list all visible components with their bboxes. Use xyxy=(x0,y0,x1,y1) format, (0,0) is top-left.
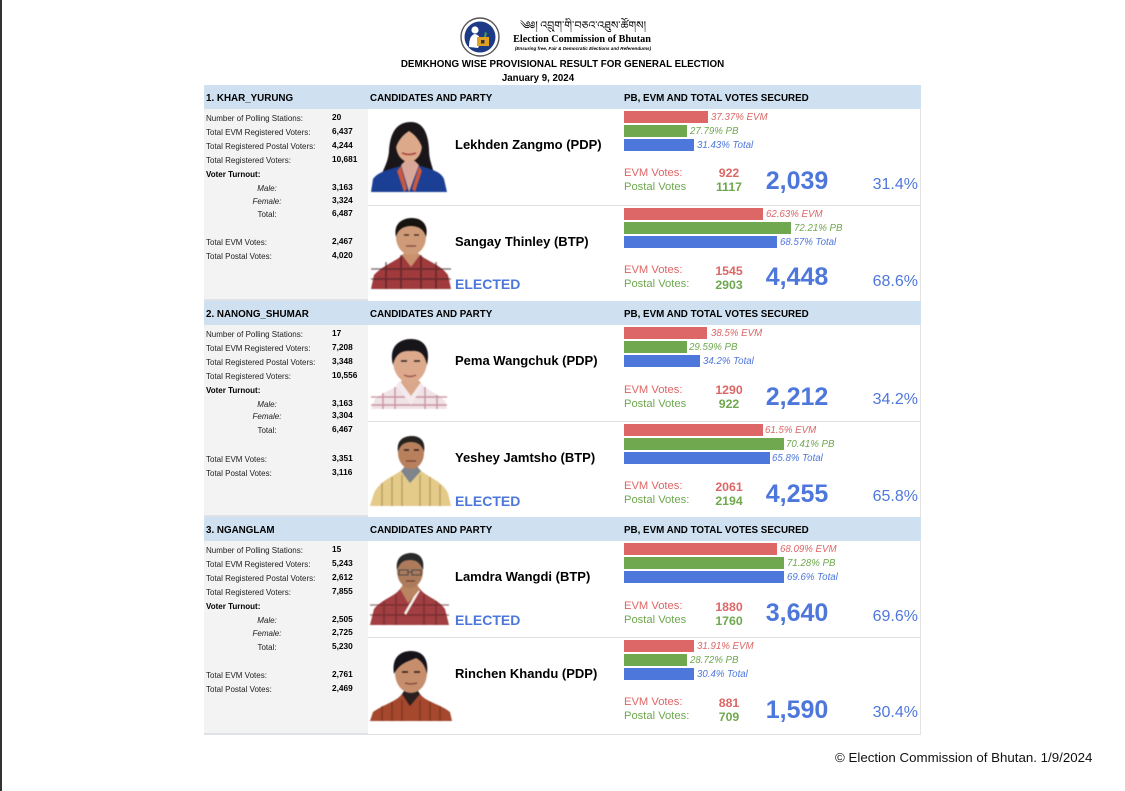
constituency statistics: Male: xyxy=(257,184,277,193)
total votes: 2,212 xyxy=(766,383,828,411)
section header band: PB, EVM AND TOTAL VOTES SECURED xyxy=(624,525,809,536)
candidate name: Lekhden Zangmo (PDP) xyxy=(455,137,602,152)
constituency statistics: 2,505 xyxy=(332,614,353,624)
constituency statistics: Total Postal Votes: xyxy=(206,469,272,478)
postal votes label: Postal Votes xyxy=(624,398,686,410)
constituency statistics: 3,163 xyxy=(332,398,353,408)
EVM votes label: EVM Votes: xyxy=(624,264,682,276)
EVM bar label: 37.37% EVM xyxy=(711,112,768,123)
total votes: 4,255 xyxy=(766,480,828,508)
EVM bar label: 31.91% EVM xyxy=(697,641,754,652)
candidate: Pema Wangchuk xyxy=(368,325,921,422)
EVM bar xyxy=(624,640,694,652)
constituency statistics: 17 xyxy=(332,328,341,338)
constituency statistics: Total EVM Votes: xyxy=(206,238,267,247)
EVM bar label: 61.5% EVM xyxy=(765,425,816,436)
constituency statistics: 6,487 xyxy=(332,208,353,218)
title: DEMKHONG WISE PROVISIONAL RESULT FOR GENERAL ELECTION xyxy=(401,59,724,70)
constituency statistics: 2,469 xyxy=(332,683,353,693)
postal votes count: 709 xyxy=(719,710,739,724)
EVM votes count: 1545 xyxy=(715,264,743,278)
EVM votes label: EVM Votes: xyxy=(624,480,682,492)
EVM bar label: 38.5% EVM xyxy=(711,328,762,339)
vote share: 31.4% xyxy=(873,176,918,193)
total bar label: 34.2% Total xyxy=(703,356,754,367)
PB bar label: 72.21% PB xyxy=(794,223,842,234)
panel: section 1 Khar Yurung xyxy=(204,85,921,301)
constituency statistics: 5,230 xyxy=(332,641,353,651)
EVM votes count: 1880 xyxy=(715,600,743,614)
PB bar xyxy=(624,654,687,666)
constituency statistics: 3,304 xyxy=(332,410,353,420)
constituency statistics: Voter Turnout: xyxy=(206,170,260,179)
constituency statistics: Number of Polling Stations: xyxy=(206,330,303,339)
constituency statistics xyxy=(204,541,368,735)
postal votes count: 1117 xyxy=(716,180,742,194)
constituency statistics: 7,855 xyxy=(332,586,353,596)
section header band: CANDIDATES AND PARTY xyxy=(370,525,492,536)
PB bar label: 27.79% PB xyxy=(690,126,738,137)
constituency statistics: Number of Polling Stations: xyxy=(206,114,303,123)
portrait: Lamdra Wangdi xyxy=(370,552,450,626)
constituency statistics: 2,761 xyxy=(332,669,353,679)
candidate name: Pema Wangchuk (PDP) xyxy=(455,353,598,368)
constituency statistics: 3,324 xyxy=(332,195,353,205)
constituency statistics: 10,556 xyxy=(332,370,357,380)
motto: (Ensuring free, Fair & Democratic Elections and Referendums) xyxy=(515,46,651,51)
constituency statistics xyxy=(204,325,368,517)
constituency statistics: Total Registered Voters: xyxy=(206,588,291,597)
constituency statistics: Total EVM Votes: xyxy=(206,455,267,464)
total bar xyxy=(624,236,777,248)
constituency statistics: Female: xyxy=(253,629,281,638)
PB bar xyxy=(624,557,784,569)
constituency statistics: Voter Turnout: xyxy=(206,602,260,611)
total bar label: 30.4% Total xyxy=(697,669,748,680)
section header band: PB, EVM AND TOTAL VOTES SECURED xyxy=(624,309,809,320)
EVM votes count: 1290 xyxy=(715,383,743,397)
candidate: Sangay Thinley xyxy=(368,206,921,301)
constituency statistics: Total EVM Votes: xyxy=(206,671,267,680)
constituency statistics: Total: xyxy=(257,643,277,652)
constituency statistics: 15 xyxy=(332,544,341,554)
section header band: 1. KHAR_YURUNG xyxy=(206,93,293,104)
postal votes label: Postal Votes: xyxy=(624,494,689,506)
total bar xyxy=(624,452,770,464)
postal votes label: Postal Votes: xyxy=(624,710,689,722)
constituency statistics: 6,437 xyxy=(332,126,353,136)
constituency statistics: Total Postal Votes: xyxy=(206,252,272,261)
constituency statistics: Total Registered Voters: xyxy=(206,156,291,165)
constituency statistics: Total Registered Voters: xyxy=(206,372,291,381)
EVM votes label: EVM Votes: xyxy=(624,384,682,396)
panel: section 3 Nganglam xyxy=(204,517,921,735)
date: January 9, 2024 xyxy=(502,73,574,84)
total votes: 1,590 xyxy=(766,696,828,724)
section header band xyxy=(204,85,921,109)
total votes: 4,448 xyxy=(766,263,828,291)
constituency statistics: Voter Turnout: xyxy=(206,386,260,395)
copyright footer: © Election Commission of Bhutan. 1/9/2024 xyxy=(835,750,1092,765)
total bar xyxy=(624,139,694,151)
section header band: 2. NANONG_SHUMAR xyxy=(206,309,309,320)
constituency statistics: 2,612 xyxy=(332,572,353,582)
postal votes label: Postal Votes: xyxy=(624,278,689,290)
EVM votes count: 2061 xyxy=(715,480,743,494)
header: logo and organisation name xyxy=(460,17,651,57)
PB bar label: 28.72% PB xyxy=(690,655,738,666)
vote share: 65.8% xyxy=(873,488,918,505)
total bar label: 65.8% Total xyxy=(772,453,823,464)
constituency statistics: Total: xyxy=(257,210,277,219)
constituency statistics xyxy=(204,109,368,301)
section header band: 3. NGANGLAM xyxy=(206,525,275,536)
vote share: 30.4% xyxy=(873,704,918,721)
candidate name: Rinchen Khandu (PDP) xyxy=(455,666,597,681)
EVM bar xyxy=(624,327,707,339)
constituency statistics: Total EVM Registered Voters: xyxy=(206,344,310,353)
constituency statistics: 5,243 xyxy=(332,558,353,568)
candidate name: Lamdra Wangdi (BTP) xyxy=(455,569,590,584)
EVM votes count: 881 xyxy=(719,696,739,710)
PB bar xyxy=(624,341,687,353)
section header band: CANDIDATES AND PARTY xyxy=(370,93,492,104)
section header band xyxy=(204,301,921,325)
constituency statistics: Number of Polling Stations: xyxy=(206,546,303,555)
EVM votes label: EVM Votes: xyxy=(624,696,682,708)
elected badge: ELECTED xyxy=(455,276,520,292)
total bar label: 31.43% Total xyxy=(697,140,753,151)
section header band: PB, EVM AND TOTAL VOTES SECURED xyxy=(624,93,809,104)
elected badge: ELECTED xyxy=(455,493,520,509)
constituency statistics: Total EVM Registered Voters: xyxy=(206,128,310,137)
organisation name: Election Commission of Bhutan xyxy=(513,34,651,45)
postal votes count: 1760 xyxy=(715,614,743,628)
constituency statistics: 10,681 xyxy=(332,154,357,164)
PB bar label: 71.28% PB xyxy=(787,558,835,569)
candidate: Lekhden Zangmo xyxy=(368,109,921,206)
candidate name: Yeshey Jamtsho (BTP) xyxy=(455,450,595,465)
candidate: Lamdra Wangdi xyxy=(368,541,921,638)
EVM bar label: 68.09% EVM xyxy=(780,544,837,555)
total bar xyxy=(624,668,694,680)
postal votes count: 922 xyxy=(719,397,739,411)
PB bar label: 70.41% PB xyxy=(786,439,834,450)
portrait: Lekhden Zangmo xyxy=(370,121,448,193)
constituency statistics: Female: xyxy=(253,412,281,421)
section header band xyxy=(204,517,921,541)
constituency statistics: Female: xyxy=(253,197,281,206)
constituency statistics: Male: xyxy=(257,400,277,409)
constituency statistics: 3,348 xyxy=(332,356,353,366)
PB bar label: 29.59% PB xyxy=(689,342,737,353)
total votes: 3,640 xyxy=(766,599,828,627)
postal votes count: 2194 xyxy=(715,494,743,508)
candidate name: Sangay Thinley (BTP) xyxy=(455,234,589,249)
total bar label: 69.6% Total xyxy=(787,572,838,583)
EVM votes label: EVM Votes: xyxy=(624,600,682,612)
constituency statistics: Total: xyxy=(257,426,277,435)
elected badge: ELECTED xyxy=(455,612,520,628)
constituency statistics: 7,208 xyxy=(332,342,353,352)
portrait: Sangay Thinley xyxy=(370,217,452,290)
postal votes label: Postal Votes xyxy=(624,181,686,193)
EVM bar xyxy=(624,424,763,436)
constituency statistics: 2,725 xyxy=(332,627,353,637)
constituency statistics: 3,351 xyxy=(332,453,353,463)
total bar label: 68.57% Total xyxy=(780,237,836,248)
total bar xyxy=(624,571,784,583)
candidate: Yeshey Jamtsho xyxy=(368,422,921,517)
total bar xyxy=(624,355,700,367)
constituency statistics: Total Registered Postal Voters: xyxy=(206,142,315,151)
constituency statistics: Male: xyxy=(257,616,277,625)
portrait: Rinchen Khandu xyxy=(370,650,453,722)
icon: Election Commission emblem xyxy=(460,17,500,57)
portrait: Pema Wangchuk xyxy=(370,338,448,410)
postal votes count: 2903 xyxy=(715,278,743,292)
constituency statistics: Total Registered Postal Voters: xyxy=(206,358,315,367)
PB bar xyxy=(624,125,687,137)
EVM bar xyxy=(624,208,763,220)
PB bar xyxy=(624,222,791,234)
candidate: Rinchen Khandu xyxy=(368,638,921,735)
constituency statistics: 6,467 xyxy=(332,424,353,434)
EVM bar label: 62.63% EVM xyxy=(766,209,823,220)
constituency statistics: 3,116 xyxy=(332,467,352,477)
constituency statistics: Total Registered Postal Voters: xyxy=(206,574,315,583)
vote share: 34.2% xyxy=(873,391,918,408)
postal votes label: Postal Votes xyxy=(624,614,686,626)
panel: section 2 Nanong Shumar xyxy=(204,301,921,517)
EVM votes count: 922 xyxy=(719,166,739,180)
constituency statistics: 3,163 xyxy=(332,182,353,192)
constituency statistics: 4,020 xyxy=(332,250,353,260)
constituency statistics: 4,244 xyxy=(332,140,353,150)
constituency statistics: Total Postal Votes: xyxy=(206,685,272,694)
constituency statistics: 2,467 xyxy=(332,236,353,246)
EVM bar xyxy=(624,111,708,123)
EVM bar xyxy=(624,543,777,555)
constituency statistics: 20 xyxy=(332,112,341,122)
total votes: 2,039 xyxy=(766,167,828,195)
PB bar xyxy=(624,438,784,450)
portrait: Yeshey Jamtsho xyxy=(370,435,452,507)
vote share: 69.6% xyxy=(873,608,918,625)
EVM votes label: EVM Votes: xyxy=(624,167,682,179)
constituency statistics: Total EVM Registered Voters: xyxy=(206,560,310,569)
section header band: CANDIDATES AND PARTY xyxy=(370,309,492,320)
vote share: 68.6% xyxy=(873,273,918,290)
